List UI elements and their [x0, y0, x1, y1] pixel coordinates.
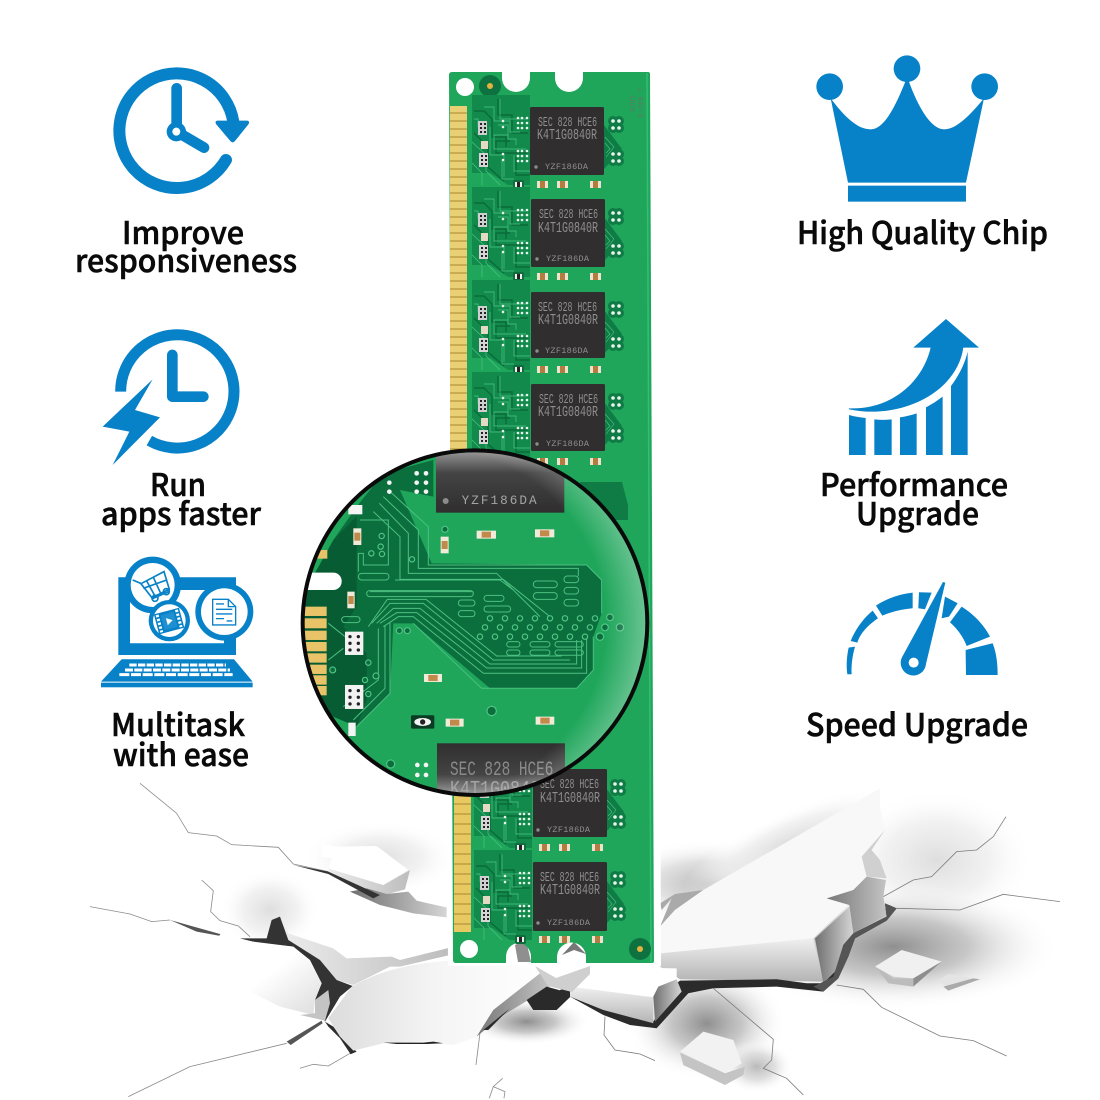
- lens vias: [330, 526, 624, 768]
- memory chip 4: K4T1G0840R: [538, 404, 598, 421]
- icon: crown: [816, 55, 998, 202]
- label: run apps faster: Run: [150, 460, 206, 505]
- memory chip 1: K4T1G0840R: [537, 127, 597, 144]
- icon: speedometer: [847, 582, 998, 676]
- label: high quality chip: High Quality Chip: [797, 208, 1048, 253]
- label: multitask with ease: [111, 700, 249, 775]
- black crack: [560, 903, 897, 1028]
- small rocks right: [875, 950, 942, 978]
- magnifier lens: [300, 447, 653, 802]
- cracked floor, right half: [560, 768, 1060, 1095]
- memory chip 1: YZF186DA: [545, 162, 589, 172]
- gold contact strip: [450, 106, 471, 932]
- lens chip bottom: SEC 828 HCE6: [450, 759, 553, 782]
- big shard: [660, 890, 703, 927]
- mounting vias: [479, 75, 501, 97]
- memory chip 2: SEC 828 HCE6: [539, 207, 598, 223]
- white halo around module: [445, 66, 661, 966]
- document bubble: [195, 583, 253, 641]
- memory chip 3: [531, 292, 605, 358]
- board traces around chips: [472, 95, 626, 944]
- black crack: [240, 917, 353, 1022]
- label: multitask with ease: with ease: [113, 730, 249, 775]
- label: speed upgrade: Speed Upgrade: [806, 700, 1028, 745]
- laptop screen: [118, 577, 236, 655]
- memory chip 1: [530, 107, 604, 175]
- lens board: [312, 456, 611, 789]
- memory chip 7: [533, 769, 607, 837]
- debris seen through notches: [515, 940, 531, 962]
- marking: [627, 88, 643, 117]
- memory chip 4: SEC 828 HCE6: [539, 392, 598, 408]
- lens chip bottom: [437, 743, 565, 793]
- lens chip top: [436, 447, 564, 513]
- cart bubble: [124, 557, 181, 613]
- serpentine traces: [342, 573, 583, 655]
- small rock bottom: [680, 1032, 742, 1073]
- memory chip 2: K4T1G0840R: [538, 220, 598, 237]
- dark copper area: [332, 460, 602, 726]
- marking: 1829: [627, 95, 635, 112]
- memory chip 8: K4T1G0840R: [540, 882, 600, 899]
- rubble below module: [535, 966, 590, 992]
- upper left shard: [328, 868, 410, 895]
- soft shadows: [607, 768, 1060, 1093]
- icon: laptop multitask: [101, 557, 253, 687]
- soft shadows: [220, 822, 590, 1045]
- lens components: [345, 471, 554, 777]
- label: multitask with ease: Multitask: [111, 700, 245, 745]
- gray side of mid shard: [282, 920, 450, 985]
- memory chip 7: K4T1G0840R: [540, 790, 600, 807]
- memory chip 2: [531, 199, 605, 267]
- icon: clock with lightning bolt: [103, 335, 234, 465]
- label: improve responsiveness: responsiveness: [75, 236, 297, 281]
- lens gold contacts: [304, 550, 328, 696]
- lens outline: [303, 450, 647, 795]
- RAM module: [445, 66, 661, 992]
- icon: performance bars with arrow: [849, 319, 979, 455]
- central shard: [328, 961, 547, 1051]
- lens white notch: [308, 572, 342, 590]
- memory chip 4: YZF186DA: [546, 439, 590, 449]
- left shard: [213, 935, 322, 1015]
- memory chip 3: K4T1G0840R: [538, 312, 598, 329]
- trace block right of lens: [580, 482, 628, 520]
- memory chip 8: [533, 862, 607, 931]
- lens rim glow: [501, 454, 646, 790]
- memory chip 3: SEC 828 HCE6: [538, 300, 597, 316]
- memory chip 7: YZF186DA: [547, 825, 591, 835]
- laptop keyboard: [101, 659, 253, 682]
- label: performance upgrade: Upgrade: [856, 489, 979, 534]
- memory chip 4: [531, 384, 605, 451]
- memory chip 8: YZF186DA: [547, 918, 591, 928]
- crack lines: [90, 783, 505, 1098]
- memory chip 2: YZF186DA: [546, 254, 590, 264]
- label: performance upgrade: [820, 460, 1008, 534]
- memory chip 3: YZF186DA: [545, 346, 589, 356]
- marking: L 94V-0: [635, 88, 643, 117]
- lower left shard: [567, 967, 677, 997]
- lens traces: [328, 490, 602, 727]
- label: improve responsiveness: Improve: [122, 208, 244, 253]
- label: improve responsiveness: [75, 208, 297, 281]
- circuit board: [449, 72, 654, 963]
- icon: clock with arrow: [119, 73, 249, 188]
- memory chip 1: SEC 828 HCE6: [538, 115, 597, 131]
- label: run apps faster: [101, 460, 261, 534]
- lens chip top: YZF186DA: [462, 493, 537, 508]
- crack lines: [604, 817, 1060, 1095]
- label: run apps faster: apps faster: [101, 489, 261, 534]
- cracked floor, left half: [90, 783, 590, 1098]
- label: performance upgrade: Performance: [820, 460, 1008, 505]
- memory chip 7: SEC 828 HCE6: [540, 777, 599, 793]
- lens chip bottom: K4T1G0840R: [450, 779, 550, 802]
- memory chip 8: SEC 828 HCE6: [540, 870, 599, 886]
- video bubble: [149, 600, 190, 641]
